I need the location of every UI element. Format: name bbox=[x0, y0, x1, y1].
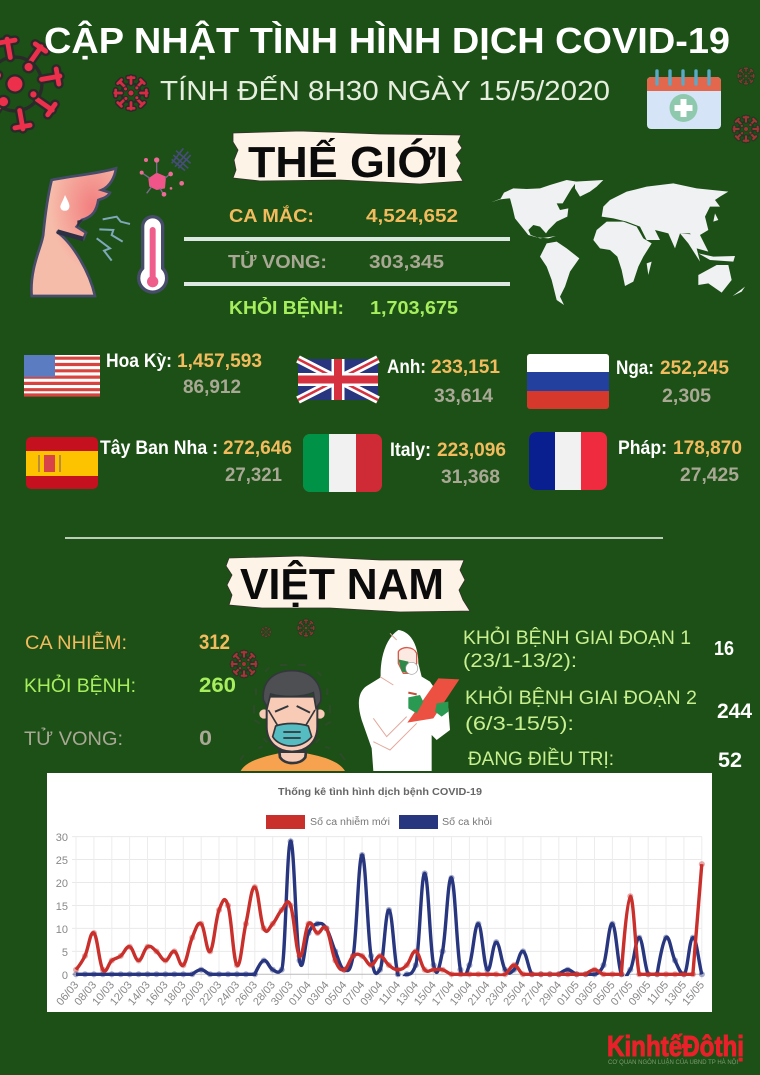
icon: large virus top left bbox=[0, 31, 68, 137]
y axis labels: 5 bbox=[62, 947, 68, 959]
x axis labels: 22/03 bbox=[197, 979, 224, 1008]
country: Spain: 272,646 bbox=[223, 438, 292, 459]
country: UK: Anh: bbox=[387, 357, 426, 378]
heading ribbon: Việt Nam: VIỆT NAM bbox=[240, 559, 444, 609]
legend: Số ca khỏi bbox=[442, 816, 492, 828]
legend: Số ca nhiễm mới bbox=[310, 815, 390, 828]
y axis labels: 0 bbox=[62, 970, 68, 982]
x axis labels: 06/03 bbox=[54, 979, 81, 1008]
world stat: recovered: 1,703,675 bbox=[370, 298, 458, 318]
x axis labels: 18/03 bbox=[162, 979, 189, 1008]
vietnam detail: under treatment bbox=[468, 748, 742, 772]
y axis labels: 10 bbox=[56, 924, 68, 936]
vietnam detail: under treatment: 52 bbox=[718, 749, 742, 772]
country: UK: 233,151 bbox=[431, 357, 500, 378]
country: Spain bbox=[26, 437, 292, 489]
vietnam stat: recovered: KHỎI BỆNH: bbox=[24, 675, 136, 697]
red line: new cases per day bbox=[76, 864, 702, 975]
country: USA: 1,457,593 bbox=[177, 351, 262, 372]
vietnam detail: phase 1 recovered: (23/1-13/2): bbox=[463, 651, 577, 672]
x axis labels: 13/04 bbox=[394, 979, 421, 1008]
illustration: sneezing person bbox=[31, 168, 130, 296]
vietnam stat: recovered bbox=[24, 674, 236, 697]
legend bbox=[266, 815, 492, 829]
blue line: recovered per day bbox=[76, 841, 702, 980]
icon: germs bbox=[140, 148, 191, 197]
country: France: 27,425 bbox=[680, 465, 739, 486]
country: USA bbox=[24, 351, 262, 398]
x axis labels: 14/03 bbox=[126, 979, 153, 1008]
illustration: man with mask bbox=[240, 665, 345, 771]
vietnam stat: deaths: TỬ VONG: bbox=[24, 728, 123, 750]
vietnam detail: phase 1 recovered bbox=[463, 627, 734, 672]
panel: line chart bbox=[47, 773, 712, 1012]
country: Russia: 252,245 bbox=[660, 358, 729, 379]
chart title: Thống kê tình hình dịch bệnh COVID-19 bbox=[278, 786, 482, 798]
country: France: Pháp: bbox=[618, 438, 667, 459]
vietnam detail: phase 2 recovered: KHỎI BỆNH GIAI ĐOẠN 2 bbox=[465, 687, 697, 709]
x axis labels: 21/04 bbox=[466, 979, 492, 1008]
x axis labels: 11/04 bbox=[377, 979, 403, 1007]
heading ribbon: Thế giới: THẾ GIỚI bbox=[248, 137, 448, 187]
x axis labels: 13/05 bbox=[662, 979, 689, 1008]
icon: thermometer bbox=[139, 217, 167, 292]
icon: small viruses top right bbox=[734, 68, 758, 141]
x axis labels: 09/05 bbox=[627, 979, 653, 1008]
title: CẬP NHẬT TÌNH HÌNH DỊCH COVID-19 bbox=[44, 19, 730, 61]
country: France: 178,870 bbox=[673, 438, 742, 459]
country: Russia bbox=[527, 354, 729, 409]
world stat: cases bbox=[229, 205, 458, 226]
vietnam stat: deaths bbox=[24, 727, 212, 750]
icon: small viruses vietnam bbox=[232, 620, 314, 676]
x axis labels bbox=[54, 979, 707, 1008]
vietnam detail: phase 1 recovered: 16 bbox=[714, 638, 734, 660]
x axis labels: 17/04 bbox=[430, 979, 457, 1008]
world map bbox=[491, 180, 745, 305]
world stat: deaths bbox=[228, 251, 444, 272]
icon: calendar bbox=[647, 71, 721, 129]
country: Italy bbox=[303, 434, 506, 492]
y axis labels: 25 bbox=[56, 855, 68, 867]
x axis labels: 03/04 bbox=[305, 979, 332, 1008]
x axis labels: 05/05 bbox=[591, 979, 618, 1008]
vietnam detail: phase 1 recovered: KHỎI BỆNH GIAI ĐOẠN 1 bbox=[463, 627, 691, 649]
x axis labels: 30/03 bbox=[269, 979, 296, 1008]
country: Italy: 223,096 bbox=[437, 440, 506, 461]
world stat: deaths: TỬ VONG: bbox=[228, 251, 327, 272]
x axis labels: 29/04 bbox=[537, 979, 564, 1008]
vietnam stat: deaths: 0 bbox=[199, 727, 212, 750]
icon: small virus by subtitle bbox=[115, 77, 147, 109]
x axis labels: 15/04 bbox=[412, 979, 439, 1008]
vietnam stat: cases bbox=[25, 631, 230, 654]
vietnam detail: phase 2 recovered bbox=[465, 687, 752, 735]
x axis labels: 20/03 bbox=[180, 979, 206, 1008]
vietnam detail: under treatment: ĐANG ĐIỀU TRỊ: bbox=[468, 748, 614, 770]
country: USA: Hoa Kỳ: bbox=[106, 351, 172, 372]
x axis labels: 15/05 bbox=[680, 979, 707, 1008]
world stat: cases: 4,524,652 bbox=[366, 206, 458, 226]
country: Spain: Tây Ban Nha : bbox=[100, 438, 218, 459]
country: USA: 86,912 bbox=[183, 377, 241, 398]
world stat: cases: CA MẮC: bbox=[229, 205, 314, 226]
x axis labels: 23/04 bbox=[484, 979, 510, 1008]
country: France bbox=[529, 432, 742, 490]
logo: Kinh te & Do thi: CƠ QUAN NGÔN LUẬN CỦA UBND TP HÀ NỘI bbox=[608, 1057, 738, 1066]
x axis labels: 03/05 bbox=[573, 979, 600, 1008]
x axis labels: 12/03 bbox=[108, 979, 135, 1008]
x axis labels: 19/04 bbox=[448, 979, 475, 1008]
vietnam detail: phase 2 recovered: (6/3-15/5): bbox=[465, 714, 574, 735]
illustration: doctor in protective suit bbox=[359, 630, 459, 771]
x axis labels: 28/03 bbox=[251, 979, 278, 1008]
x axis labels: 16/03 bbox=[144, 979, 171, 1008]
world stat: recovered: KHỎI BỆNH: bbox=[229, 297, 344, 318]
country: Italy: Italy: bbox=[390, 440, 431, 461]
vietnam stat: cases: 312 bbox=[199, 631, 230, 654]
x axis labels: 10/03 bbox=[90, 979, 117, 1008]
subtitle: TÍNH ĐẾN 8H30 NGÀY 15/5/2020 bbox=[160, 75, 610, 106]
world stat: recovered bbox=[229, 297, 458, 318]
country: UK bbox=[298, 357, 500, 407]
y axis labels: 20 bbox=[56, 878, 68, 890]
world stat: deaths: 303,345 bbox=[369, 252, 444, 272]
y axis labels: 30 bbox=[56, 832, 68, 844]
x axis labels: 07/05 bbox=[609, 979, 636, 1008]
x axis labels: 24/03 bbox=[215, 979, 242, 1008]
x axis labels: 27/04 bbox=[519, 979, 546, 1008]
country: Italy: 31,368 bbox=[441, 467, 500, 488]
country: UK: 33,614 bbox=[434, 386, 493, 407]
x axis labels: 07/04 bbox=[341, 979, 367, 1008]
x axis labels: 09/04 bbox=[358, 979, 385, 1008]
country: Russia: 2,305 bbox=[662, 386, 711, 407]
x axis labels: 08/03 bbox=[72, 979, 99, 1008]
x axis labels: 01/04 bbox=[287, 979, 314, 1008]
y axis labels: 15 bbox=[56, 901, 68, 913]
country: Spain: 27,321 bbox=[225, 465, 282, 486]
x axis labels: 05/04 bbox=[323, 979, 349, 1008]
vietnam stat: cases: CA NHIỄM: bbox=[25, 632, 127, 654]
x axis labels: 26/03 bbox=[233, 979, 260, 1008]
x axis labels: 25/04 bbox=[501, 979, 528, 1008]
country: Russia: Nga: bbox=[616, 358, 654, 379]
x axis labels: 11/05 bbox=[645, 979, 671, 1007]
vietnam stat: recovered: 260 bbox=[199, 674, 236, 697]
vietnam detail: phase 2 recovered: 244 bbox=[717, 700, 752, 723]
x axis labels: 01/05 bbox=[555, 979, 582, 1008]
y axis labels bbox=[56, 832, 68, 982]
